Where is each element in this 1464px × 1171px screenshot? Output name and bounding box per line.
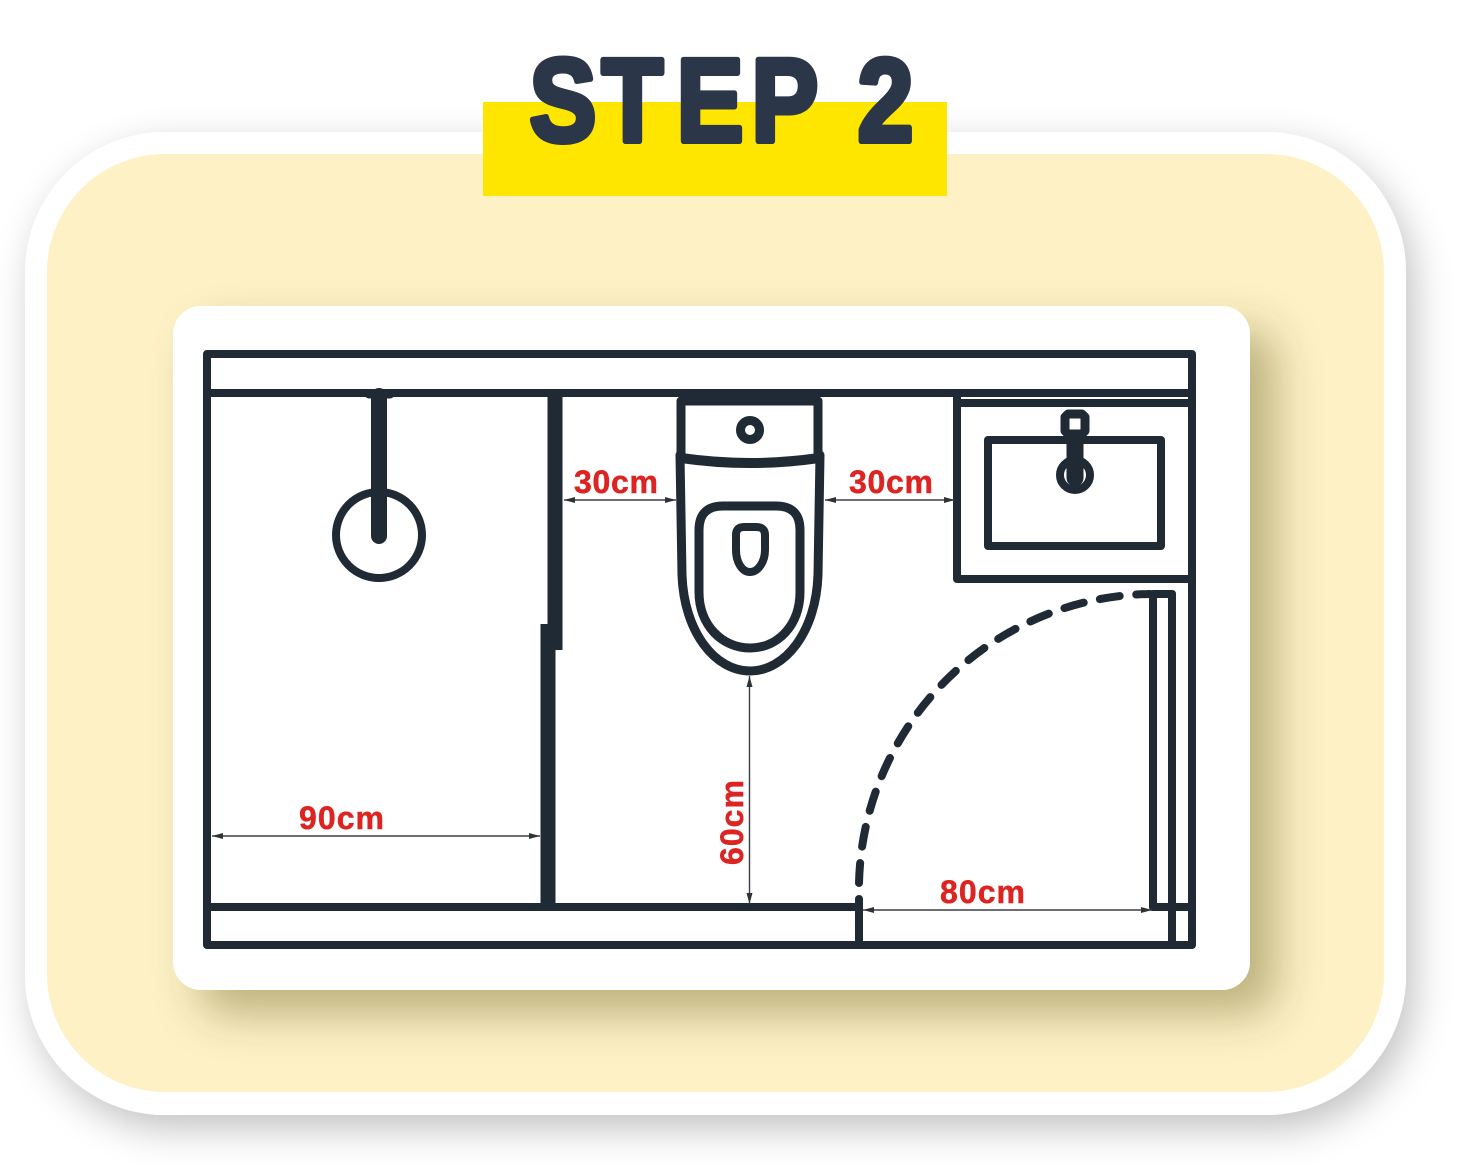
door xyxy=(859,594,1172,907)
basin xyxy=(988,440,1161,546)
dimension: 90cm: 90cm xyxy=(299,800,384,836)
door swing arc xyxy=(859,594,1150,883)
dimension: 90cm xyxy=(212,800,540,839)
dimension: 60cm xyxy=(714,676,752,904)
title: STEP 2 xyxy=(530,35,913,167)
toilet bowl xyxy=(680,455,820,671)
dimension: 80cm xyxy=(863,874,1152,913)
dimension: 30cm left xyxy=(564,464,676,503)
toilet inner xyxy=(736,527,765,572)
dimension: 30cm left: 30cm xyxy=(574,464,658,500)
outer white card xyxy=(25,132,1406,1115)
white floor plan card xyxy=(173,306,1250,990)
faucet xyxy=(1066,425,1084,478)
dimension: 30cm right: 30cm xyxy=(849,464,933,500)
yellow title band xyxy=(483,102,947,196)
dimension: 30cm right xyxy=(825,464,955,503)
cream panel xyxy=(47,154,1384,1092)
shower xyxy=(336,394,422,578)
toilet seat xyxy=(699,506,800,648)
dimension: 60cm: 60cm xyxy=(714,780,750,865)
toilet tank xyxy=(681,401,818,456)
floor plan walls xyxy=(207,354,1192,945)
dimension: 80cm: 80cm xyxy=(940,874,1025,910)
toilet xyxy=(680,399,820,671)
vanity and sink xyxy=(957,393,1192,579)
